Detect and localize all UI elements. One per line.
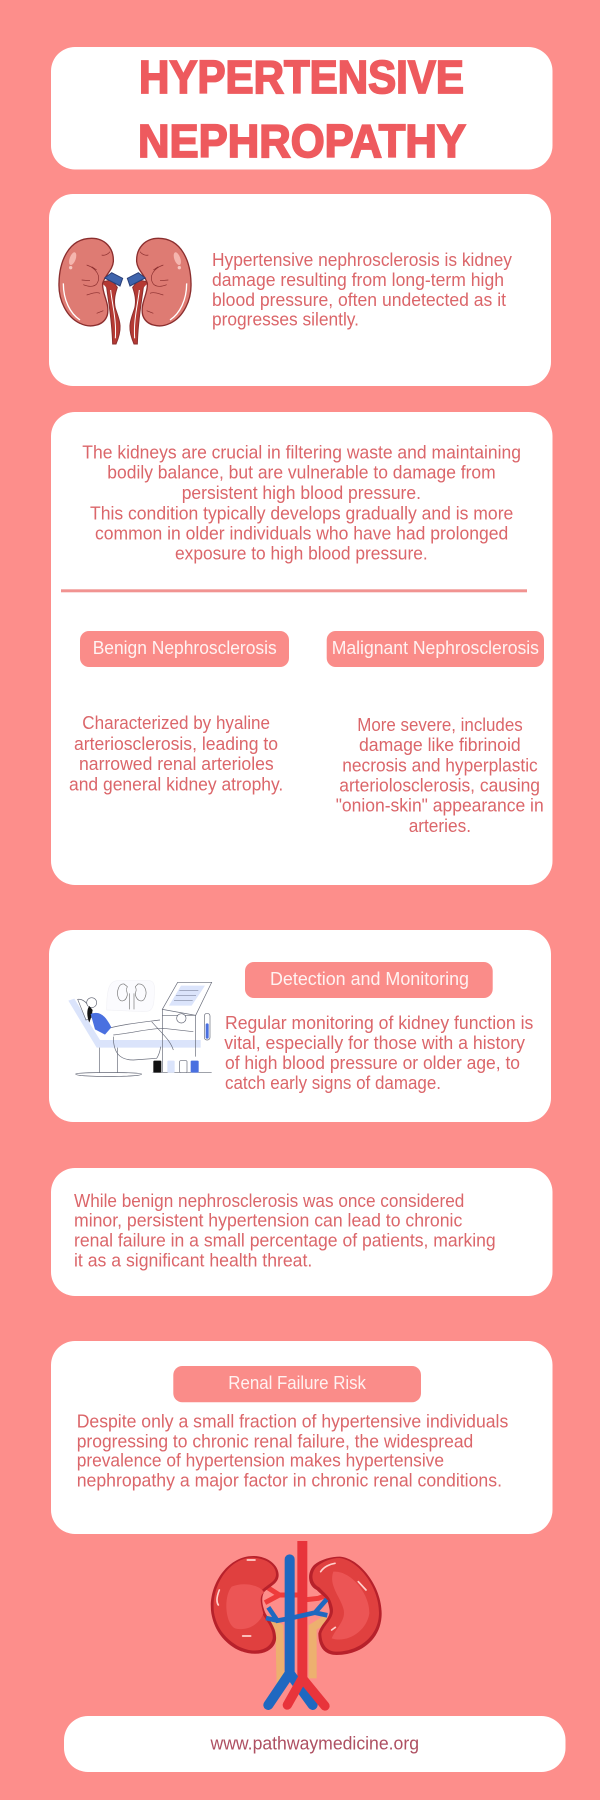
- heading: renal failure risk: [173, 1366, 421, 1402]
- text: chronic failure note: it as a significant health threat.: [74, 1250, 312, 1270]
- text: monitoring: [224, 1013, 533, 1093]
- text: kidney function: The kidneys are crucial in filtering waste and maintaining: [82, 442, 521, 462]
- text: chronic failure note: minor, persistent hypertension can lead to chronic: [74, 1210, 462, 1230]
- text: kidney function: This condition typically develops gradually and is more: [90, 503, 513, 523]
- text: intro: blood pressure, often undetected as it: [212, 290, 506, 310]
- text: kidney function: persistent high blood pressure.: [182, 483, 421, 503]
- text: kidney function: [82, 442, 521, 563]
- panel: introduction: [49, 194, 551, 386]
- text: kidney function: common in older individuals who have had prolonged: [95, 523, 508, 543]
- text: intro: Hypertensive nephrosclerosis is kidney: [212, 250, 512, 270]
- title: [138, 51, 466, 167]
- panel: kidneys and types: [51, 412, 552, 885]
- text: monitoring: of high blood pressure or older age, to: [225, 1053, 520, 1073]
- text: monitoring: vital, especially for those with a history: [224, 1033, 525, 1053]
- panel: chronic failure note: [51, 1168, 552, 1296]
- icon: pair of kidneys: [59, 238, 191, 344]
- text: chronic failure note: While benign nephrosclerosis was once considered: [74, 1191, 464, 1211]
- heading: malignant: Malignant Nephrosclerosis: [332, 638, 539, 658]
- text: monitoring: catch early signs of damage.: [225, 1073, 441, 1093]
- text: kidney function: bodily balance, but are vulnerable to damage from: [107, 462, 496, 482]
- text: benign: [69, 713, 283, 794]
- footer: website: [64, 1716, 566, 1772]
- text: renal failure risk: nephropathy a major factor in chronic renal conditions.: [77, 1471, 502, 1491]
- text: benign: arteriosclerosis, leading to: [74, 734, 278, 754]
- text: malignant: arteries.: [409, 816, 471, 836]
- text: intro: progresses silently.: [212, 310, 359, 330]
- text: malignant: "onion-skin" appearance in: [336, 796, 544, 816]
- heading: renal failure risk: Renal Failure Risk: [228, 1373, 367, 1393]
- heading: detection and monitoring: [245, 962, 493, 998]
- text: malignant: necrosis and hyperplastic: [342, 756, 538, 776]
- text: renal failure risk: [77, 1411, 508, 1491]
- text: chronic failure note: [74, 1191, 496, 1270]
- heading: benign: Benign Nephrosclerosis: [93, 638, 277, 658]
- title: HYPERTENSIVE: [139, 51, 464, 103]
- heading: benign: [80, 631, 289, 667]
- panel: renal failure risk: [51, 1341, 552, 1534]
- icon: kidneys with aorta and vena cava: [211, 1541, 382, 1706]
- text: malignant: damage like fibrinoid: [359, 735, 521, 755]
- text: intro: damage resulting from long-term high: [212, 270, 504, 290]
- text: chronic failure note: renal failure in a small percentage of patients, marking: [74, 1231, 496, 1251]
- title: NEPHROPATHY: [138, 115, 466, 167]
- text: renal failure risk: progressing to chronic renal failure, the widespread: [77, 1431, 473, 1451]
- text: malignant: arteriolosclerosis, causing: [339, 776, 540, 796]
- text: renal failure risk: prevalence of hypertension makes hypertensive: [77, 1451, 444, 1471]
- footer: website: www.pathwaymedicine.org: [210, 1734, 419, 1754]
- text: renal failure risk: Despite only a small fraction of hypertensive individuals: [77, 1411, 508, 1431]
- text: malignant: [336, 715, 544, 836]
- text: monitoring: Regular monitoring of kidney function is: [225, 1013, 533, 1033]
- text: kidney function: exposure to high blood pressure.: [175, 543, 428, 563]
- panel: detection and monitoring: [49, 930, 551, 1122]
- heading: malignant: [327, 631, 544, 667]
- icon: patient on dialysis machine: [68, 981, 212, 1076]
- text: benign: narrowed renal arterioles: [79, 754, 274, 774]
- title panel: [51, 47, 552, 170]
- text: malignant: More severe, includes: [357, 715, 523, 735]
- text: benign: Characterized by hyaline: [82, 713, 270, 733]
- text: intro: [212, 250, 512, 330]
- text: benign: and general kidney atrophy.: [69, 774, 283, 794]
- heading: detection and monitoring: Detection and Monitoring: [270, 969, 469, 989]
